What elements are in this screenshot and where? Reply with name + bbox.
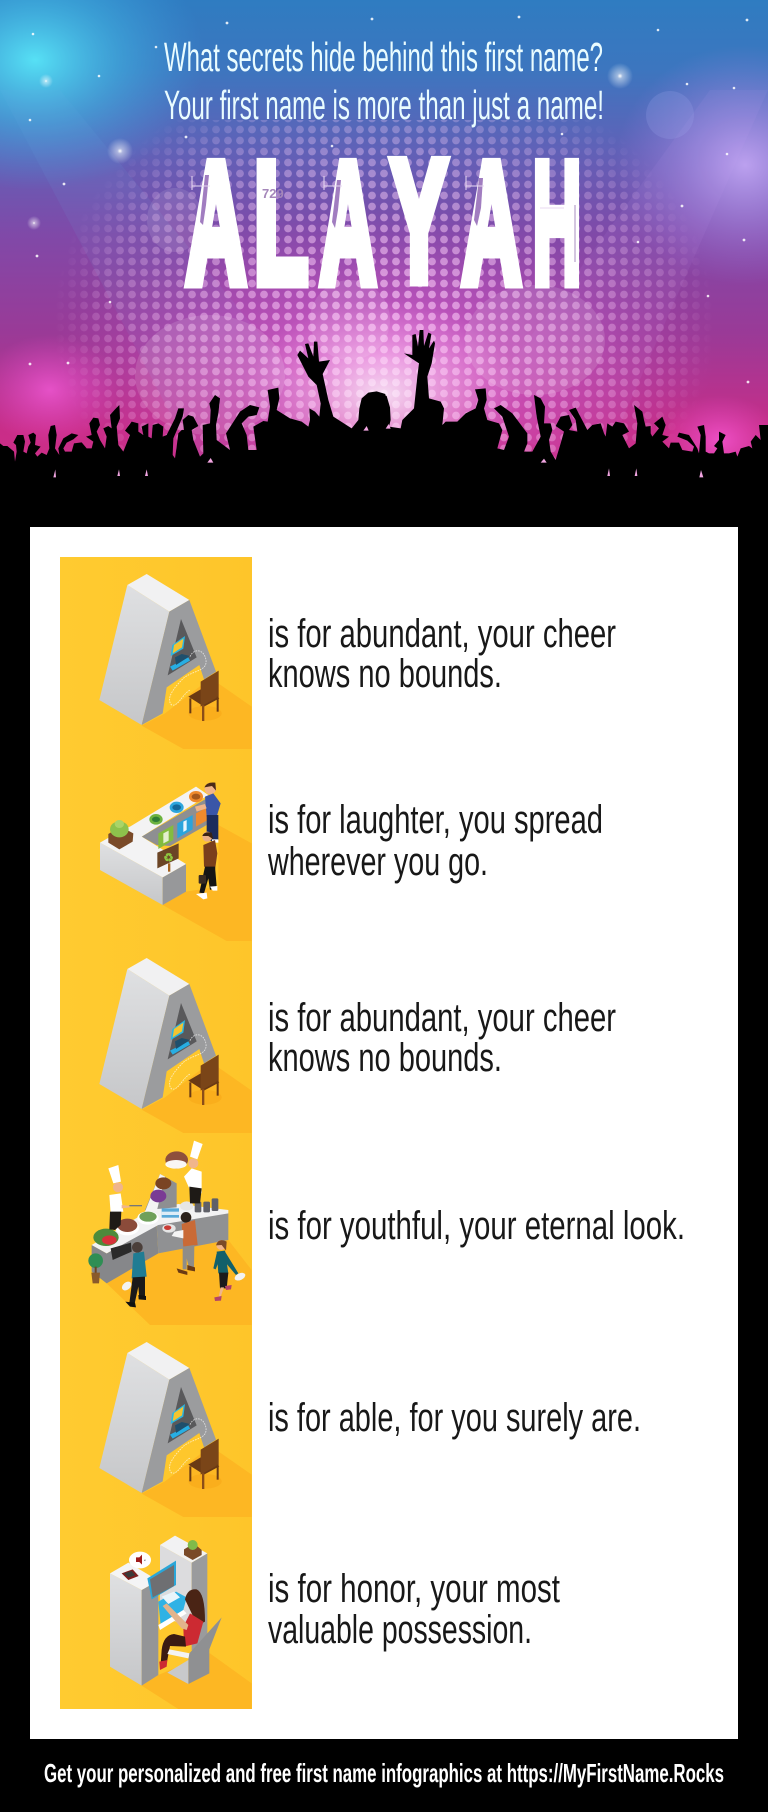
row 6 text (268, 1567, 560, 1652)
icon: letter A desk (row 5) (99, 1342, 252, 1517)
crowd silhouette: right half (383, 330, 768, 493)
name title: ALAYAH: A (186, 128, 246, 319)
row 1 text: is for abundant, your cheer (268, 612, 616, 656)
row 6 text: is for honor, your most (268, 1567, 560, 1611)
icon: letter A desk (row 1) (99, 574, 252, 749)
icon: buffet counter (row 4) (88, 1141, 252, 1325)
grunge marks on title (192, 175, 575, 262)
name title: ALAYAH: A (462, 128, 521, 319)
icon: recycling counter L (row 2): ♻ (163, 853, 173, 865)
icon: letter A desk (row 3) (99, 958, 252, 1133)
crowd silhouette: left half (0, 342, 385, 493)
row 1 text: knows no bounds. (268, 652, 502, 696)
subtitle text (164, 34, 604, 128)
name title: ALAYAH: L (254, 128, 308, 319)
row 3 text: is for abundant, your cheer (268, 996, 616, 1040)
row 2 text: wherever you go. (267, 840, 488, 884)
name title: ALAYAH: A (320, 128, 376, 319)
icon: woman at kiosk (row 6): × (144, 1557, 147, 1562)
yellow illustration column (60, 557, 252, 1709)
stars (27, 16, 749, 383)
name title: ALAYAH: Y (391, 126, 447, 317)
row 6 text: valuable possession. (268, 1608, 532, 1652)
text: H (533, 128, 581, 319)
icon: woman at kiosk (row 6) (110, 1536, 252, 1709)
row 2 text (267, 798, 603, 884)
row 1 text (268, 612, 616, 696)
white content panel (30, 527, 738, 1739)
name title: ALAYAH (186, 126, 581, 319)
grunge marks on title: 729 (262, 186, 284, 201)
row 3 text (268, 996, 616, 1080)
row 3 text: knows no bounds. (268, 1036, 502, 1080)
icon: recycling counter L (row 2) (100, 783, 252, 941)
row 2 text: is for laughter, you spread (268, 798, 603, 842)
header: concert background (0, 0, 768, 510)
